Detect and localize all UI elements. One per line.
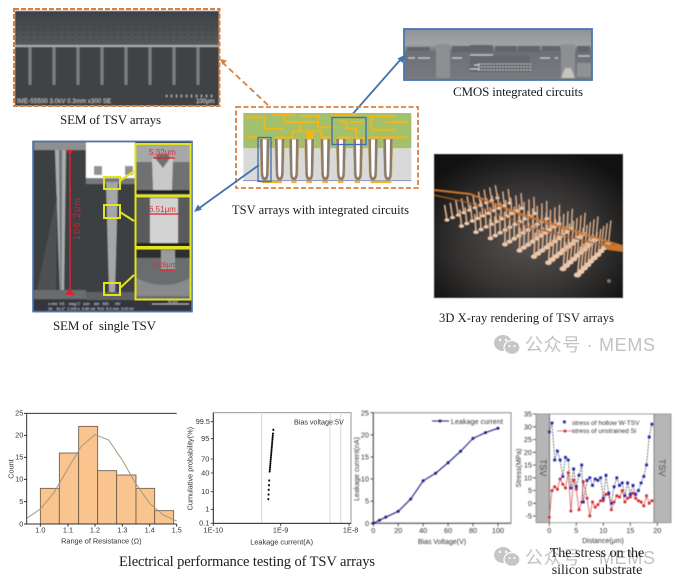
labels: probability ticks: 10 [201,487,209,496]
labels: current ticks: 1E-10 [204,525,223,534]
axis title: x: Distance(μm) [582,538,624,545]
labels: probability ticks: 99.5 [196,417,210,426]
labels: TSV side tags [538,459,667,477]
text: watermark label: 公众号 · MEMS [525,548,655,568]
chart: leakage current vs bias voltage [354,408,511,546]
series: unstrained Si [549,473,652,517]
labels: stress ticks [524,410,532,520]
labels: TSV side tags: TSV [657,459,667,477]
image: composite SEM of single TSV [33,141,192,312]
panel: SEM of single TSV [33,141,192,333]
diagram: TSV schematic [243,113,411,182]
labels: distance ticks: 0 [547,526,551,535]
labels: resistance values: 1.4 [145,525,155,534]
callouts: yellow inspection boxes and leaders [104,144,190,300]
labels: probability ticks: 40 [201,468,209,477]
labels: current ticks [204,525,358,534]
frame: blue border [404,29,592,80]
regions: TSV grey bands [536,414,671,523]
labels: probability ticks: 70 [201,454,209,463]
axis title: y: Cumulative probability(%) [185,427,194,510]
caption: 3D X-ray rendering: 3D X-ray rendering of TSV arrays [439,311,614,325]
labels: histogram tick labels: 25 [15,408,23,417]
labels: resistance values: 1.5 [172,525,182,534]
series: hollow W-TSV [549,423,652,503]
labels: stress ticks: 15 [524,460,532,470]
labels: resistance values: 1.3 [117,525,127,534]
labels: distance ticks: 20 [653,526,661,535]
labels: current ticks: 1E-8 [343,525,358,534]
caption: CMOS integrated circuits: CMOS integrated circuits [453,84,583,99]
panel: SEM of TSV arrays [14,9,220,127]
image: SEM cross-section of TSV array: IME-S5500 3.0kV 0.3mm x300 SE [17,99,111,105]
chart: resistance histogram [7,408,182,545]
image: CMOS cross-section [404,29,592,80]
labels: distance ticks: 5 [574,526,578,535]
chart: cumulative probability of leakage current [185,413,358,547]
labels: histogram tick labels: 5 [19,497,23,506]
frame: probability plot [213,413,351,523]
labels: stress ticks: 10 [524,473,532,482]
labels: current ticks: 1E-9 [273,525,288,534]
labels: current ticks [361,408,369,528]
legend: stress series [557,420,640,435]
panel: CMOS integrated circuits [404,29,592,99]
labels: distance ticks: 15 [626,526,634,535]
watermark: top WeChat MEMS [494,335,655,355]
image: composite SEM of single TSV: 16 51.0° 2 200 x 0.80 nA TLD 5.2 mm 3.00 kV [48,307,134,311]
legend: stress series: stress of unstrained Si [572,428,636,435]
icon: WeChat bubbles [494,547,520,566]
measurement: TSV depth 106.2 μm [66,150,82,295]
labels: voltage ticks: 0 [371,526,375,535]
series: leakage current [373,428,498,523]
labels: TSV side tags: TSV [538,459,548,477]
icon: WeChat bubbles [494,335,520,354]
labels: histogram tick labels: 20 [15,431,23,440]
axis title: y: Leakage current(nA) [354,437,361,501]
labels: histogram tick labels: 0 [19,519,23,528]
labels: distance ticks [547,526,661,535]
labels: current ticks: 0 [365,519,369,528]
measurement labels: red widths: 6.51μm [149,205,176,214]
caption: stress on the silicon substrate: The stress on the [550,546,644,561]
labels: stress ticks: 0 [528,499,532,508]
arrow: blue link to CMOS image [350,55,404,117]
labels: resistance values: 1.2 [90,525,100,534]
measurement labels: red widths: 3.28μm [153,262,177,269]
highlight: blue box around CMOS region [332,118,366,144]
labels: voltage ticks: 80 [469,526,477,535]
labels: current ticks: 15 [361,452,369,462]
labels: current ticks: 10 [361,474,369,484]
labels: distance ticks: 10 [599,526,607,535]
caption: stress on the silicon substrate: silicon substrate [552,563,642,578]
labels: probability ticks: 1 [205,505,209,514]
legend: stress series: stress of hollow W-TSV [572,420,640,427]
axes: histogram frame [24,413,177,527]
text: watermark label: 公众号 · MEMS [525,335,655,355]
labels: probability ticks [196,417,210,528]
image: SEM cross-section of TSV array: 100μm [196,99,214,105]
legend: leakage current: Leakage current [451,419,503,426]
labels: voltage ticks: 60 [444,526,452,535]
measurement labels: red widths [149,148,179,270]
caption: stress on the silicon substrate [550,546,644,578]
axis title: x: Bias Voltage(V) [418,539,466,546]
measurement: TSV depth 106.2 μm: 106.2μm [72,198,82,240]
labels: resistance values: 1.1 [63,525,73,534]
bars: histogram counts [40,426,174,524]
labels: stress ticks: -5 [526,512,532,520]
labels: voltage ticks: 100 [492,526,504,535]
caption: TSV arrays with integrated circuits: TSV arrays with integrated circuits [232,203,409,217]
measurement labels: red widths: 5.32μm [149,148,176,157]
labels: probability ticks: 0.1 [199,519,209,528]
image: 3D pillar array render [434,154,625,298]
axis title: x: Range of Resistance (Ω) [61,536,142,545]
labels: stress ticks: 25 [524,435,532,444]
frame: stress chart [536,414,671,523]
axis title: x: Leakage current(A) [250,538,313,547]
caption: SEM of TSV arrays: SEM of TSV arrays [60,112,161,127]
image: composite SEM of single TSV: x mm VS mag ▽ curr det WD HV [48,302,121,306]
chart: stress on silicon substrate [516,410,671,545]
frame: blue border [33,142,192,312]
watermark: bottom WeChat MEMS [494,547,655,568]
labels: stress ticks: 5 [528,486,532,495]
labels: probability ticks: 95 [201,434,209,443]
labels: resistance values [35,525,182,534]
data: scatter points [268,425,273,499]
annotation: bias voltage: Bias voltage:5V [294,419,344,427]
frame: line chart [373,413,511,523]
labels: stress ticks: 30 [524,422,532,431]
highlight: blue box around single TSV [258,138,271,182]
caption: SEM of single TSV: SEM of single TSV [53,318,157,333]
panel: 3D X-ray rendering [434,154,625,325]
labels: stress ticks: 35 [524,410,532,418]
labels: histogram tick labels: 15 [15,453,23,462]
curve: normal fit [27,435,177,521]
labels: voltage ticks: 40 [419,526,427,535]
frame: thin grey border [434,154,623,298]
axis title: y: Stress(MPa) [516,449,523,487]
image: composite SEM of single TSV: 50 μm [168,300,178,304]
labels: resistance values: 1.0 [35,525,45,534]
labels: stress ticks: 20 [524,448,532,457]
labels: histogram tick labels: 10 [15,475,23,484]
labels: current ticks: 5 [365,496,369,506]
arrow: orange dashed link from SEM to schematic [220,59,270,107]
labels: histogram tick labels [15,408,23,528]
labels: current ticks: 20 [361,430,369,440]
panel: TSV arrays with integrated circuits [232,107,418,217]
frame: orange dashed box [236,107,418,188]
caption: electrical performance testing: Electrical performance testing of TSV arrays [119,554,375,570]
labels: voltage ticks [371,526,504,535]
labels: voltage ticks: 20 [394,526,402,535]
arrow: blue link to single TSV image [194,165,259,212]
labels: current ticks: 25 [361,408,369,418]
image: SEM cross-section of TSV array [15,11,219,106]
axis title: y: Count [7,459,16,479]
frame: orange dashed border [14,9,220,106]
